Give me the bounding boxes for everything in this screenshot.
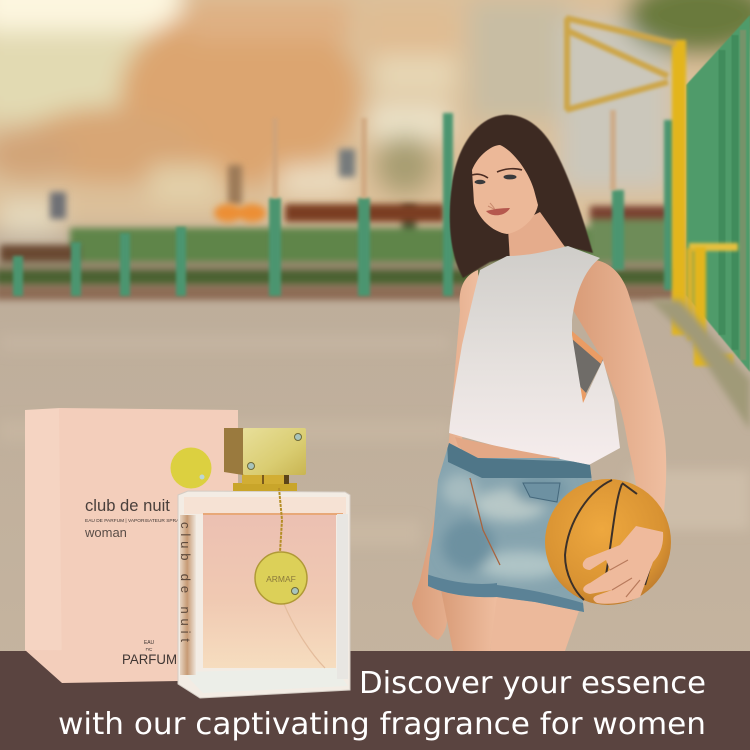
cap collar (233, 483, 297, 491)
spray tube (284, 604, 325, 668)
left edge (180, 515, 196, 675)
hems (426, 574, 586, 614)
denim shorts (428, 443, 592, 612)
yellow disc (170, 448, 212, 488)
gold pendant (255, 552, 307, 604)
waistband (447, 441, 592, 478)
pendant brand: ARMAF (266, 574, 296, 584)
glass body (178, 491, 350, 698)
bottom glass base (183, 668, 348, 693)
basketball (545, 479, 671, 605)
perfume box lower part: PARFUM (122, 651, 177, 667)
pink liquid (203, 514, 336, 668)
grass strip on court edge (650, 300, 750, 430)
left edge refracted print: club de nuit (178, 522, 193, 642)
blurred horizontal ground streaks (0, 335, 750, 546)
box side (25, 408, 68, 683)
fly seam (470, 478, 500, 565)
woman model (412, 115, 671, 651)
de label: DE (146, 648, 153, 654)
blurred windows and tree trunk (50, 149, 416, 255)
yellow goal frame (566, 18, 738, 360)
sports bra (572, 333, 603, 393)
hair back (450, 115, 593, 278)
facial features (472, 169, 522, 215)
green lawn behind fence (0, 204, 675, 300)
right arm (573, 260, 666, 530)
woman label: woman (84, 525, 127, 540)
neck (508, 212, 565, 262)
box front (59, 408, 238, 683)
small descriptor: EAU DE PARFUM | VAPORISATEUR SPRAY | 6 (85, 518, 189, 524)
headline line 2: with our captivating fragrance for women (58, 707, 706, 742)
gold cap (243, 428, 306, 475)
hand holding ball (583, 526, 663, 604)
blurred orange uprights (275, 110, 613, 198)
perfume box lower part (25, 650, 238, 683)
chain (279, 488, 282, 552)
cap side (224, 428, 243, 475)
eau de label: EAU (144, 640, 155, 646)
blurred trees and buildings (0, 0, 750, 235)
brand name: club de nuit (85, 496, 170, 515)
headline line 1: Discover your essence (359, 666, 706, 701)
left leg (441, 590, 498, 651)
face (472, 145, 538, 234)
white crop top (449, 246, 620, 466)
perfume bottle (178, 428, 350, 698)
midriff (455, 437, 560, 462)
chain-link green fence (686, 15, 750, 372)
blurred fence posts (13, 113, 674, 296)
orange liquid line (203, 513, 343, 515)
right glass edge (337, 514, 348, 679)
bottom banner (0, 651, 750, 750)
pocket (523, 483, 560, 502)
top fill band (184, 497, 346, 514)
cap stem (242, 474, 289, 484)
perfume box (25, 408, 238, 683)
left upper arm (412, 270, 480, 640)
cap gems (248, 434, 302, 470)
banner headline (58, 666, 706, 742)
right leg (490, 596, 580, 651)
